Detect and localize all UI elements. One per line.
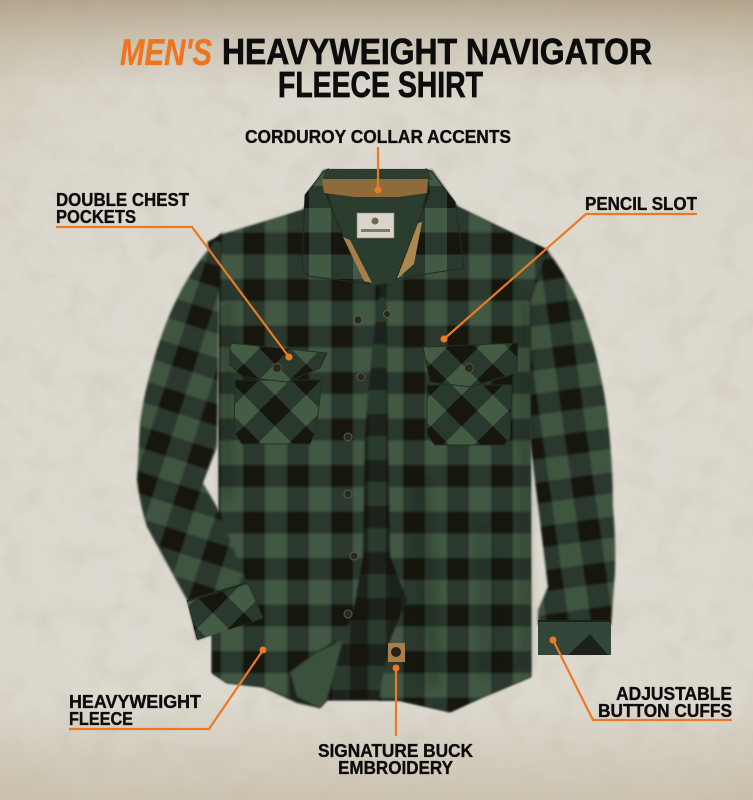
shirt: collar stand [322,169,432,180]
shirt: neck label [357,213,394,238]
title line two: FLEECE SHIRT [278,64,483,105]
shirt: right sleeve [525,240,615,625]
callout: signature buck embroidery [318,664,473,778]
callout: heavyweight fleece [69,646,266,729]
shirt: corduroy right strip [397,222,422,279]
callout: signature buck embroidery: SIGNATURE BUCK [318,741,473,761]
title line one: HEAVYWEIGHT NAVIGATOR [222,31,652,72]
callout: corduroy collar accents [245,126,511,194]
callout: signature buck embroidery: EMBROIDERY [338,758,453,778]
callout: pencil slot: PENCIL SLOT [585,194,697,214]
shirt: right cuff [538,620,611,655]
callout: adjustable button cuffs [550,636,732,721]
shirt: left cuff [187,583,263,640]
title accent word: MEN'S [120,32,212,73]
shirt: buck embroidery patch [388,643,405,662]
shirt: right collar leaf [396,169,464,279]
shirt: dark body underlay [208,170,547,712]
shirt: collar interior fleece [322,174,430,286]
callout: corduroy collar accents: CORDUROY COLLAR ACCENTS [245,126,511,147]
callout: adjustable button cuffs: BUTTON CUFFS [598,701,732,721]
callout: double chest pockets [56,190,292,360]
shirt: body left panel [208,200,380,698]
callout: double chest pockets: DOUBLE CHEST [56,190,189,210]
callout: adjustable button cuffs: ADJUSTABLE [616,684,732,704]
shirt: body right panel [378,200,547,712]
title [120,31,652,105]
shirt: front buttons [344,310,390,618]
shirt: left sleeve [137,232,263,640]
shirt: corduroy collar band [322,179,428,197]
shirt: corduroy left strip [343,237,372,283]
shirt: front hem fold [290,640,343,708]
callout: heavyweight fleece: HEAVYWEIGHT [69,692,201,712]
shirt illustration [137,169,615,712]
shirt: left chest pocket [230,343,327,444]
shirt: right chest pocket [423,343,518,445]
callout: double chest pockets: POCKETS [56,207,136,227]
shirt: left collar leaf [302,169,370,284]
shirt: fabric fold shadows [222,300,530,690]
callout: heavyweight fleece: FLEECE [69,709,133,729]
shirt: inner lining between open fronts [320,280,400,700]
callout: pencil slot [440,194,697,342]
